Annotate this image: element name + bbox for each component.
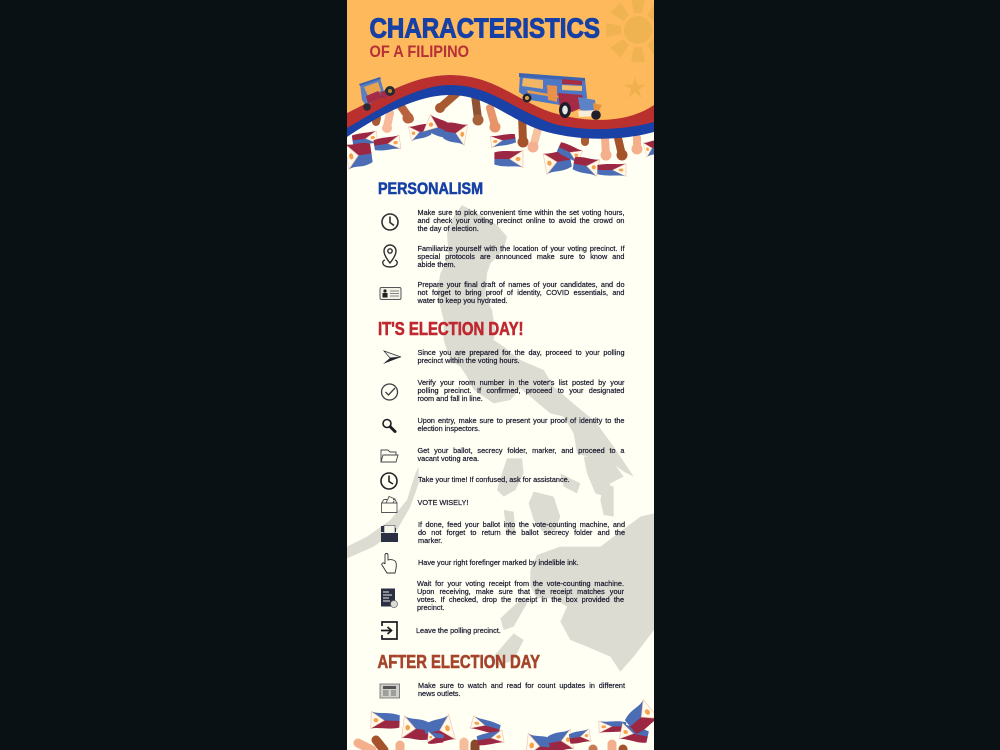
red wave band — [347, 75, 654, 131]
text: feed ballot: do not forget to return the ballot secrecy folder and the — [418, 528, 625, 537]
icon: newspaper — [380, 684, 400, 698]
text: final draft: not forget to bring proof of identity, COVID essentials, and — [418, 288, 624, 297]
text: voting time: and check your voting precinct online to avoid the crowd on — [418, 216, 624, 225]
sun emblem — [606, 0, 654, 62]
text: feed ballot: If done, feed your ballot into the vote-counting machine, and — [418, 520, 625, 529]
infographic canvas — [347, 0, 654, 750]
text: watch updates: Make sure to watch and read for count updates in different — [418, 681, 625, 690]
text: voting receipt: Wait for your voting receipt from the vote-counting machine. — [417, 579, 624, 588]
poster artwork — [347, 0, 654, 750]
text: proceed to precinct: Since you are prepared for the day, proceed to your polling — [418, 348, 624, 357]
icon: pointing hand — [382, 554, 396, 573]
text: voting time — [418, 208, 624, 233]
icon: clock large — [381, 473, 397, 489]
text: verify room — [417, 378, 624, 403]
heading: it's election day: IT'S ELECTION DAY! — [378, 319, 524, 339]
icon: magnifier — [383, 420, 395, 432]
text: verify room: polling precinct. If confirmed, proceed to your designated — [418, 386, 624, 395]
text: voting receipt: votes. If checked, drop the receipt in the box provided the — [417, 595, 624, 604]
raised arms top — [376, 93, 642, 160]
heading: after election day: AFTER ELECTION DAY — [378, 652, 540, 672]
text: upon entry — [418, 416, 624, 433]
icon: ballot box — [382, 496, 397, 512]
text: get ballot: Get your ballot, secrecy folder, marker, and proceed to a — [418, 446, 624, 455]
text: final draft: Prepare your final draft of names of your candidates, and do — [418, 280, 624, 289]
text: watch updates: news outlets. — [418, 689, 461, 698]
text: voting time: the day of election. — [418, 224, 479, 233]
heading: personalism: PERSONALISM — [378, 179, 483, 198]
text: leave precinct: Leave the polling precinct. — [416, 626, 501, 635]
icon: open folder — [381, 450, 398, 462]
subtitle: OF A FILIPINO — [370, 43, 469, 61]
text: feed ballot — [418, 520, 625, 545]
text: take your time: Take your time! If confused, ask for assistance. — [418, 475, 570, 484]
text: voting receipt — [416, 579, 624, 612]
top flags — [345, 115, 662, 176]
text: indelible ink: Have your right forefinger marked by indelible ink. — [418, 558, 579, 567]
text: voting receipt: precinct. — [417, 603, 445, 612]
text: proceed to precinct — [418, 348, 624, 365]
text: precinct location: abide them. — [418, 260, 456, 269]
text: precinct location: special protocols are announced make sure to know and — [418, 252, 624, 261]
text: voting time: Make sure to pick convenient time within the set voting hours, — [418, 208, 624, 217]
bottom flags — [371, 700, 659, 750]
text: upon entry: Upon entry, make sure to present your proof of identity to the — [418, 416, 624, 425]
blue wave band — [347, 85, 654, 139]
icon: exit door — [381, 622, 397, 639]
icon: map pin — [383, 245, 397, 267]
icon: check circle — [382, 384, 398, 400]
title: CHARACTERISTICS — [370, 12, 600, 44]
text: feed ballot: marker. — [418, 536, 442, 545]
jeepney — [519, 73, 602, 120]
text: voting receipt: Upon receiving, make sure that the receipt matches your — [417, 587, 624, 596]
raised arms bottom — [358, 740, 623, 750]
text: final draft — [417, 280, 624, 305]
text: precinct location — [418, 244, 625, 269]
icon: receipt — [381, 588, 398, 608]
icon: dark folder — [381, 526, 398, 542]
text: final draft: water to keep you hydrated. — [418, 296, 508, 305]
star emblem — [624, 78, 646, 98]
Philippine map silhouette — [347, 205, 654, 672]
icon: id card — [380, 288, 401, 300]
icon: paper plane — [383, 351, 401, 364]
panel background — [347, 0, 654, 750]
text: verify room: Verify your room number in the voter's list posted by your — [418, 378, 624, 387]
text: watch updates — [418, 681, 626, 698]
text: proceed to precinct: precinct within the voting hours. — [418, 356, 520, 365]
text: vote wisely: VOTE WISELY! — [418, 498, 468, 507]
icon: clock — [382, 214, 398, 230]
header background — [347, 0, 654, 121]
pedicab tricycle — [359, 77, 395, 111]
text: upon entry: election inspectors. — [418, 424, 480, 433]
text: verify room: room and fall in line. — [418, 394, 483, 403]
text: get ballot — [417, 446, 625, 463]
text: get ballot: vacant voting area. — [418, 454, 479, 463]
text: precinct location: Familiarize yourself with the location of your voting precinct. If — [418, 244, 624, 253]
